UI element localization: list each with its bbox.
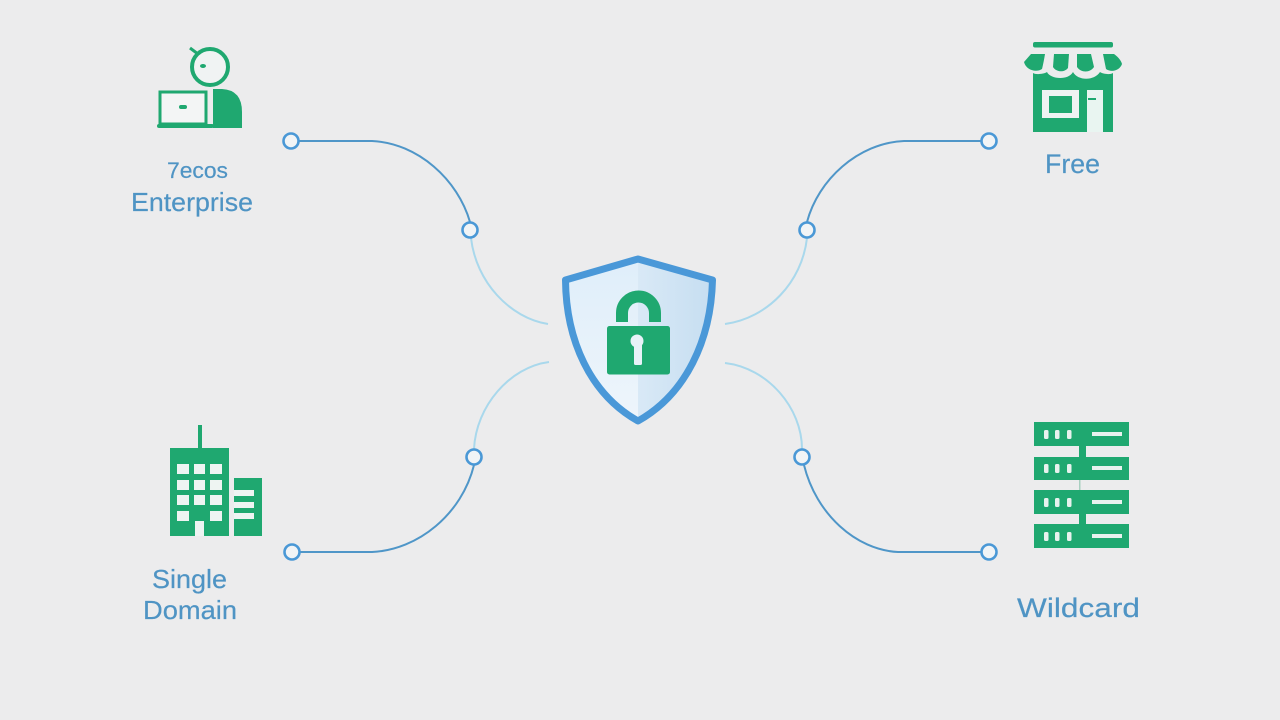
connector: bottom left [284,362,549,560]
connector: top right [725,134,996,324]
connector: top left [284,134,548,324]
label: Enterprise: Enterprise [131,187,253,217]
label: Wildcard: Wildcard [1017,593,1140,623]
label: Free: Free [1045,149,1100,179]
label: Single: Single [152,564,227,594]
icon: server rack [1034,422,1129,548]
connector: bottom right [725,363,996,560]
label: Domain: Domain [143,595,237,625]
icon: storefront [1024,42,1122,132]
icon: office buildings [170,425,262,536]
icon: central shield with padlock [566,259,712,421]
label: garbled heading: 7ecos [167,158,228,183]
icon: padlock [607,297,670,374]
icon: person with laptop [157,48,242,128]
